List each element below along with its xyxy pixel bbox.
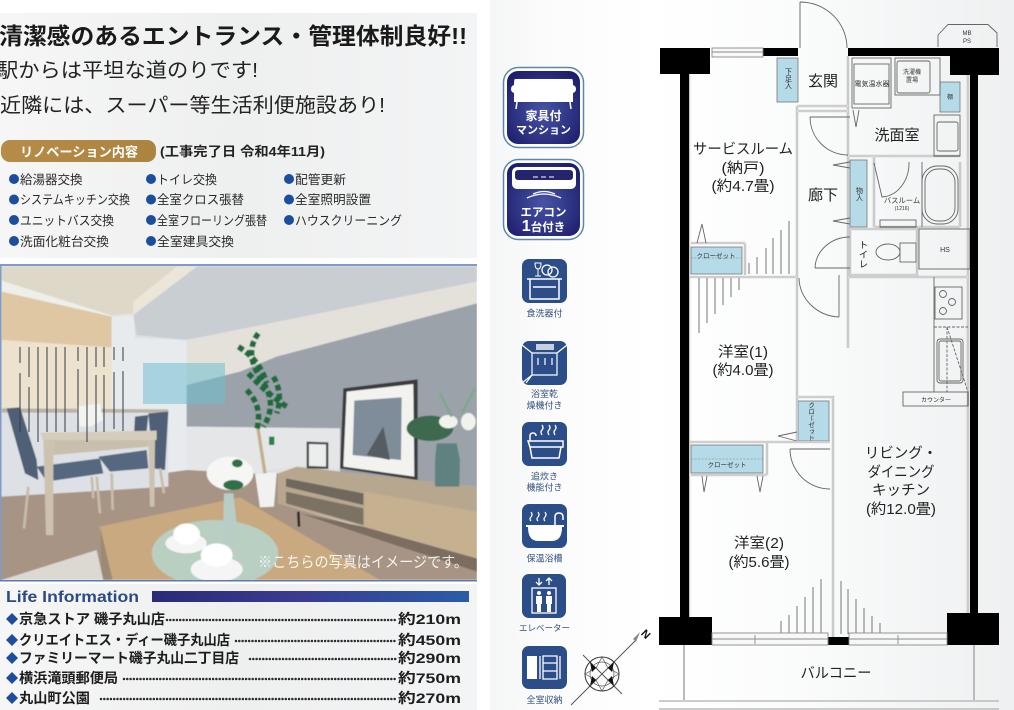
icon: compass: N bbox=[638, 628, 652, 642]
room labels: サービスルーム bbox=[693, 141, 793, 158]
small fixture labels: 下足入 bbox=[784, 68, 792, 90]
list: renovation items: 洗面化粧台交換 bbox=[20, 234, 109, 249]
icon: elevator bbox=[519, 574, 570, 633]
list: nearby facilities: 約270m bbox=[398, 690, 461, 706]
room labels: 洋室(1) bbox=[718, 344, 768, 361]
room labels: (納戸) bbox=[722, 160, 764, 177]
panel: renovation summary bbox=[0, 13, 477, 258]
badge: renovation contents: リノベーション内容 bbox=[20, 144, 138, 160]
list: nearby facilities: 京急ストア 磯子丸山店 bbox=[19, 611, 165, 627]
small fixture labels: MB bbox=[962, 31, 972, 37]
list: nearby facilities: 丸山町公園 bbox=[19, 690, 90, 706]
fixtures and doors bbox=[697, 2, 997, 492]
list: renovation items: ユニットバス交換 bbox=[20, 214, 114, 228]
room labels: (約5.6畳) bbox=[728, 554, 790, 571]
room labels: 洗面室 bbox=[874, 127, 920, 144]
list: renovation items: 給湯器交換 bbox=[20, 173, 83, 187]
list: nearby facilities: クリエイトエス・ディー磯子丸山店 bbox=[19, 632, 230, 648]
icon: compass bbox=[571, 628, 652, 705]
list: nearby facilities: 約750m bbox=[398, 670, 461, 686]
small fixture labels: 物入 bbox=[856, 186, 863, 202]
list: renovation items: 全室照明設置 bbox=[295, 193, 371, 207]
list: nearby facilities: ファミリーマート磯子丸山二丁目店 bbox=[19, 650, 239, 666]
floor ticks bbox=[699, 221, 880, 634]
list: renovation items: ハウスクリーニング bbox=[295, 214, 402, 228]
list: renovation items: システムキッチン交換 bbox=[20, 193, 130, 207]
label: thermal bathtub: 保温浴槽 bbox=[526, 552, 563, 564]
room labels: バルコニー bbox=[800, 666, 872, 682]
small fixture labels: HS bbox=[940, 247, 950, 254]
icon: one air conditioner: 1台付き bbox=[522, 218, 565, 235]
bar: heading rule bbox=[152, 591, 469, 602]
room labels: トイレ bbox=[856, 240, 868, 268]
icon: furnished mansion: 家具付 bbox=[525, 108, 562, 123]
small fixture labels: クローゼット bbox=[708, 460, 746, 469]
balcony bbox=[659, 645, 999, 709]
blue storage areas bbox=[691, 58, 960, 473]
label: dishwasher: 食洗器付 bbox=[526, 308, 563, 318]
list: nearby facilities: 約290m bbox=[398, 650, 461, 666]
room labels: リビング・ bbox=[865, 445, 937, 462]
icon: dishwasher bbox=[522, 259, 567, 318]
list: nearby facilities: 約450m bbox=[398, 632, 461, 648]
label: storage: 全室収納 bbox=[526, 694, 563, 705]
label: bathroom dryer: 浴室乾 bbox=[531, 388, 558, 399]
list: renovation items: トイレ交換 bbox=[157, 173, 217, 187]
room labels: (約4.7畳) bbox=[712, 178, 774, 195]
small fixture labels: クローゼット bbox=[806, 402, 815, 441]
panel: right background bbox=[490, 0, 1014, 710]
icon: furnished mansion bbox=[504, 68, 584, 148]
text: flat road from station: 駅からは平坦な道のりです! bbox=[0, 59, 258, 82]
room labels: 廊下 bbox=[808, 187, 838, 204]
room labels bbox=[693, 73, 937, 682]
small fixture labels: 電気温水器 bbox=[854, 79, 890, 88]
room labels: (約4.0畳) bbox=[712, 362, 774, 379]
icon: reheating bath bbox=[522, 422, 567, 492]
list: renovation items: 全室建具交換 bbox=[157, 235, 234, 249]
icon: bathroom dryer: 燥機付き bbox=[526, 400, 563, 410]
list: renovation items bbox=[9, 172, 402, 249]
small fixture labels bbox=[696, 31, 972, 469]
room labels: 洋室(2) bbox=[734, 535, 784, 552]
icon: bathroom dryer bbox=[522, 341, 567, 410]
small fixture labels: PS bbox=[963, 39, 971, 45]
icon: storage in all rooms bbox=[522, 646, 567, 705]
small fixture labels: カウンター bbox=[921, 396, 951, 404]
windows bbox=[712, 48, 947, 645]
panel: life information bbox=[0, 584, 477, 710]
room labels: キッチン bbox=[872, 483, 930, 499]
list: renovation items: 全室フローリング張替 bbox=[157, 214, 267, 228]
list: nearby facilities: 約210m bbox=[398, 611, 461, 627]
floor plan bbox=[659, 2, 999, 709]
room labels: 玄関 bbox=[808, 73, 838, 90]
label: reheating: 追炊き bbox=[531, 470, 558, 482]
badge: renovation contents bbox=[1, 140, 156, 162]
label: elevator: エレベーター bbox=[519, 623, 570, 633]
list: nearby facilities bbox=[6, 611, 461, 706]
small fixture labels: 棚 bbox=[947, 93, 953, 101]
heading: life information: Life Information bbox=[6, 589, 139, 606]
small fixture labels: 置場 bbox=[906, 76, 918, 84]
room labels: (約12.0畳) bbox=[866, 501, 936, 518]
icon: one air conditioner bbox=[504, 160, 584, 240]
caption: image note: ※こちらの写真はイメージです。 bbox=[258, 553, 468, 571]
photo: living room bbox=[0, 264, 477, 587]
interior walls bbox=[689, 56, 968, 640]
small fixture labels: バスルーム bbox=[884, 196, 920, 205]
list: renovation items: 全室クロス張替 bbox=[157, 193, 244, 207]
small fixture labels: (1216) bbox=[895, 206, 910, 212]
heading: entrance and management: 清潔感のあるエントランス・管理体制良好!! bbox=[0, 23, 467, 49]
room labels: ダイニング bbox=[868, 464, 934, 481]
list: nearby facilities: 横浜滝頭郵便局 bbox=[19, 670, 118, 686]
text: completion date: (工事完了日 令和4年11月) bbox=[160, 144, 325, 159]
icon: thermal bathtub bbox=[522, 504, 567, 564]
icon: reheating bath: 機能付き bbox=[526, 482, 563, 492]
structural walls bbox=[659, 48, 999, 645]
icon: one air conditioner: エアコン bbox=[520, 206, 566, 219]
list: renovation items: 配管更新 bbox=[295, 172, 346, 187]
small fixture labels: クローゼット bbox=[696, 251, 736, 260]
small fixture labels: 洗濯機 bbox=[903, 68, 921, 76]
text: nearby facilities: 近隣には、スーパー等生活利便施設あり! bbox=[0, 94, 385, 117]
icon: furnished mansion: マンション bbox=[516, 124, 571, 136]
